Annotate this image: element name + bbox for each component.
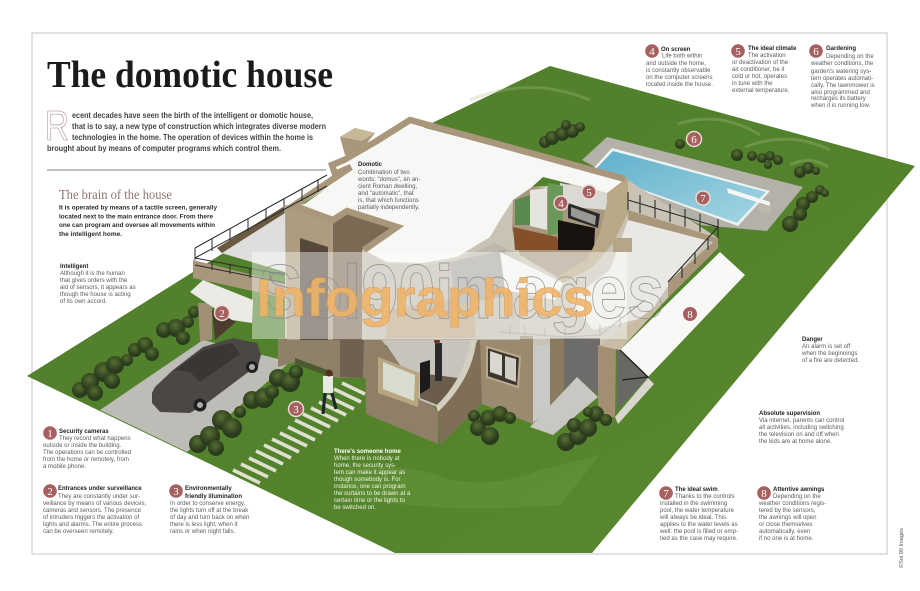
image marker 6 [686, 132, 702, 146]
callout 1: security cameras [43, 426, 131, 470]
text: absolute supervision: the kids are at home alone. [759, 439, 832, 445]
brain of the house text [59, 204, 217, 238]
text: there's someone home: When there is nobody at [334, 456, 400, 462]
image marker 8: 8 [687, 309, 693, 321]
callout 7: the ideal swim: tied as the case may require. [660, 536, 738, 542]
callout 1: security cameras: a mobile phone. [43, 464, 86, 470]
hedge beside the driveway [72, 306, 303, 456]
middle wall [362, 243, 520, 340]
callout 6: gardening [809, 44, 875, 109]
callout 5: the ideal climate: cold or hot, operates [732, 74, 787, 80]
callout 2: entrances under surveillance: veillance by means of various devices, [43, 501, 147, 507]
bedroom [500, 252, 563, 300]
callout 2: entrances under surveillance: of intruders triggers the activation of [43, 515, 139, 521]
heading: the brain of the house: The brain of the house [59, 187, 172, 202]
callout 8: attentive awnings: weather conditions regis- [758, 501, 826, 507]
callout 6: gardening: tem operates automati- [811, 76, 873, 82]
text: there's someone home: though somebody is. For [334, 477, 401, 483]
garden path [233, 383, 365, 483]
lawn [27, 66, 915, 553]
callout 2: entrances under surveillance: cameras and sensors. The presence [43, 508, 142, 514]
image marker 5: 5 [586, 187, 592, 199]
tower recess [333, 213, 393, 340]
callout 6: gardening: Gardening [826, 46, 856, 52]
callout 1: security cameras: 1 [47, 428, 53, 440]
callout 8: attentive awnings: or close themselves [759, 522, 812, 528]
callout 7: the ideal swim: Thanks to the controls [675, 494, 734, 500]
text: domotic: partially independently. [358, 205, 420, 211]
callout 5: the ideal climate: in tune with the [732, 81, 773, 87]
image marker 8 [683, 307, 697, 321]
callout 7: the ideal swim: installed in the swimming [660, 501, 727, 507]
watermark band [252, 252, 627, 339]
text: domotic: cient Roman dwelling, [358, 184, 417, 190]
divider rule [47, 169, 326, 171]
text: absolute supervision: Via internet, parents can control [759, 418, 844, 424]
callout 3: environmentally friendly illumination: friendly illumination [185, 494, 242, 500]
man on path [323, 370, 336, 414]
text: intelligent [60, 264, 136, 305]
ground floor left wall [278, 338, 367, 378]
callout 1: security cameras: outside or inside the building. [43, 443, 122, 449]
callout 2: entrances under surveillance: lights and alarms. The entire process [43, 522, 142, 528]
callout 5: the ideal climate: air conditioner, be it [732, 67, 785, 73]
callout 1: security cameras: They record what happens [59, 436, 131, 442]
brain of the house text: one can program and oversee all movements within [59, 222, 215, 229]
text: domotic [357, 162, 420, 211]
text: danger: when the beginnings [801, 351, 857, 357]
callout 3: environmentally friendly illumination: 3 [173, 486, 179, 498]
image marker 3: 3 [293, 404, 299, 416]
text: there's someone home: the curtains to be drawn at a [334, 491, 411, 497]
image marker 7 [696, 191, 710, 205]
chimney [340, 128, 375, 155]
upper house base [285, 180, 718, 345]
title: The domotic house [47, 54, 333, 96]
image marker 4 [554, 196, 568, 210]
covered passage [564, 338, 600, 397]
callout 4: on screen: located inside the house. [646, 82, 713, 88]
intro paragraph: brought about by means of computer programs which control them. [47, 143, 281, 153]
upper room [512, 187, 607, 277]
balcony railing [500, 300, 645, 338]
callout 7: the ideal swim: applies to the water levels as [660, 522, 738, 528]
brain of the house text: the intelligent home. [59, 231, 122, 238]
tall bedroom wall [557, 177, 628, 283]
car [152, 338, 261, 413]
left terrace beam [217, 207, 285, 253]
text: absolute supervision: all activities, including switching [759, 425, 844, 431]
callout 6: gardening: Depending on the [826, 54, 874, 60]
callout 5: the ideal climate: external temperature. [732, 88, 790, 94]
image marker 2: 2 [219, 308, 225, 320]
callout 4: on screen: 4 [649, 46, 655, 58]
text: danger: Danger [802, 337, 823, 343]
callout 4: on screen: On screen [661, 47, 691, 53]
callout 3: environmentally friendly illumination: there is less light, when it [170, 522, 238, 528]
text: absolute supervision: the television on and off when [759, 432, 839, 438]
text: danger [801, 337, 859, 364]
callout 6: gardening: when it is running low. [810, 103, 870, 109]
text: there's someone home: be switched on. [334, 505, 376, 511]
left parapet [193, 260, 285, 298]
text: intelligent: Although it is the human [60, 271, 125, 277]
house [190, 177, 718, 445]
intro drop cap: R [45, 102, 69, 149]
AC unit [613, 238, 632, 252]
callout 6: gardening: recharges its battery [811, 96, 867, 102]
callout 7: the ideal swim: The ideal swim [675, 487, 718, 493]
man in kitchen [434, 338, 442, 381]
terrace railing [628, 192, 718, 282]
text: domotic: Combination of two [358, 170, 410, 176]
intro paragraph [47, 110, 326, 153]
callout 6: gardening: 6 [813, 46, 819, 58]
ground floor window [487, 347, 520, 387]
callout 3: environmentally friendly illumination: of day and turn back on when [170, 515, 249, 521]
callout 3: environmentally friendly illumination: In order to conserve energy, [170, 501, 245, 507]
left terrace wall [218, 213, 285, 272]
image marker 4: 4 [558, 198, 564, 210]
text: absolute supervision: Absolute supervision [759, 411, 820, 417]
callout 4: on screen: Life both within [662, 54, 702, 60]
text: domotic: and "automatic", that [358, 191, 414, 197]
callout 6: gardening: garden's watering sys- [811, 69, 871, 75]
callout 2: entrances under surveillance: Entrances under surveillance [58, 486, 142, 492]
callout 6: gardening: cally. The lawnmower is [811, 83, 875, 89]
callout 8: attentive awnings [757, 486, 826, 542]
callout 1: security cameras: Security cameras [59, 429, 109, 435]
watermark infographics: Infographics [256, 269, 594, 328]
text: intelligent: Intelligent [60, 264, 88, 270]
callout 6: gardening: also programmed and [811, 90, 870, 96]
callout 4: on screen: on the computer screens [646, 75, 713, 81]
watermark outline text: Sol90images [258, 250, 664, 335]
awning 2 [190, 280, 253, 323]
image marker 7: 7 [700, 193, 706, 205]
intro paragraph: ecent decades have seen the birth of the intelligent or domotic house, [72, 110, 313, 120]
text: there's someone home: There's someone home [334, 449, 401, 455]
text: intelligent: though the house is acting [60, 292, 131, 298]
brain of the house text: located next to the main entrance door. From there [59, 214, 213, 220]
callout 8: attentive awnings: tered by the sensors, [759, 508, 816, 514]
callout 3: environmentally friendly illumination [169, 484, 249, 535]
image marker 2 [214, 306, 230, 320]
callout 8: attentive awnings: Depending on the [773, 494, 821, 500]
callout 4: on screen: and outside the home, [646, 61, 706, 67]
text: there's someone home: tem can make it appear as [334, 470, 405, 476]
text: domotic: is, that which functions [358, 198, 419, 204]
callout 5: the ideal climate: The ideal climate [748, 46, 797, 52]
callout 7: the ideal swim: pool, the water temperature [660, 508, 735, 514]
kitchen window [378, 357, 420, 407]
callout 3: environmentally friendly illumination: Environmentally [185, 486, 232, 492]
text: intelligent: that gives orders with the [60, 278, 128, 284]
callout 1: security cameras: The operations can be controlled [43, 450, 131, 456]
callout 1: security cameras: from the home or remotely, from [43, 457, 129, 463]
curved kitchen wall [436, 334, 477, 412]
image marker 5 [582, 185, 596, 199]
text: danger: of a fire are detected. [802, 358, 859, 364]
callout 2: entrances under surveillance: can be overseen remotely. [43, 529, 114, 535]
callout 8: attentive awnings: if no one is at home. [759, 536, 814, 542]
driveway [100, 340, 290, 452]
text: danger: An alarm is set off [802, 344, 851, 350]
callout 3: environmentally friendly illumination: rains or when night falls. [170, 529, 236, 535]
text: there's someone home: certain time or the lights to [334, 498, 406, 504]
intro paragraph: that is to say, a new type of construction which integrates diverse modern [72, 121, 326, 131]
brain of the house text: It is operated by means of a tactile screen, generally [59, 204, 217, 212]
upper left railing [195, 175, 327, 283]
text: intelligent: of its own accord. [60, 299, 107, 305]
text: there's someone home: home, the security sys- [334, 463, 396, 469]
callout 8: attentive awnings: the awnings will open [759, 515, 816, 521]
callout 5: the ideal climate: or deactivation of the [732, 60, 789, 66]
text: absolute supervision [759, 411, 844, 445]
corner box: front face [365, 338, 438, 444]
callout 5: the ideal climate: The activation [748, 53, 786, 59]
callout 4: on screen: is constantly observable [646, 68, 711, 74]
callout 4: on screen [645, 44, 713, 88]
callout 7: the ideal swim: 7 [663, 488, 669, 500]
kitchen interior [383, 334, 477, 408]
right wall [480, 336, 533, 424]
callout 5: the ideal climate: 5 [735, 46, 741, 58]
callout 8: attentive awnings: automatically, even [759, 529, 810, 535]
callout 3: environmentally friendly illumination: the lights turn off at the break [170, 508, 249, 514]
tower front [285, 206, 333, 340]
corner box: side face [438, 336, 482, 445]
text: intelligent: aid of sensors, it appears as [60, 285, 136, 291]
text: domotic: words: "domus", an an- [357, 177, 420, 183]
callout 8: attentive awnings: 8 [761, 488, 767, 500]
callout 7: the ideal swim: well: the pool is filled or emp- [659, 529, 738, 535]
white roof surface [303, 124, 624, 263]
intro paragraph: technologies in the home. The operation of devices within the home is [72, 132, 313, 142]
image marker 3 [288, 402, 304, 416]
flat roof [293, 120, 625, 263]
image credit: ©Sol 90 Images [898, 528, 905, 568]
callout 2: entrances under surveillance: 2 [47, 486, 53, 498]
callout 6: gardening: weather conditions, the [810, 61, 874, 67]
callout 5: the ideal climate [731, 44, 797, 94]
callout 8: attentive awnings: Attentive awnings [773, 487, 825, 493]
side door and wall [533, 345, 550, 423]
diving board [727, 188, 770, 206]
callout 7: the ideal swim: will always be ideal. This [659, 515, 726, 521]
image marker 6: 6 [691, 134, 697, 146]
text: there's someone home [334, 449, 411, 511]
awning 8 [620, 252, 745, 380]
right terrace [195, 175, 718, 350]
text: domotic: Domotic [358, 162, 383, 168]
callout 7: the ideal swim [659, 486, 738, 542]
callout 2: entrances under surveillance [43, 484, 147, 535]
garden shrubs by the pool [539, 120, 829, 232]
text: there's someone home: instance, one can program [334, 484, 406, 490]
parapet [293, 120, 625, 250]
callout 2: entrances under surveillance: They are constantly under sur- [58, 494, 140, 500]
swimming pool [582, 137, 803, 231]
front shrubs [468, 406, 612, 451]
